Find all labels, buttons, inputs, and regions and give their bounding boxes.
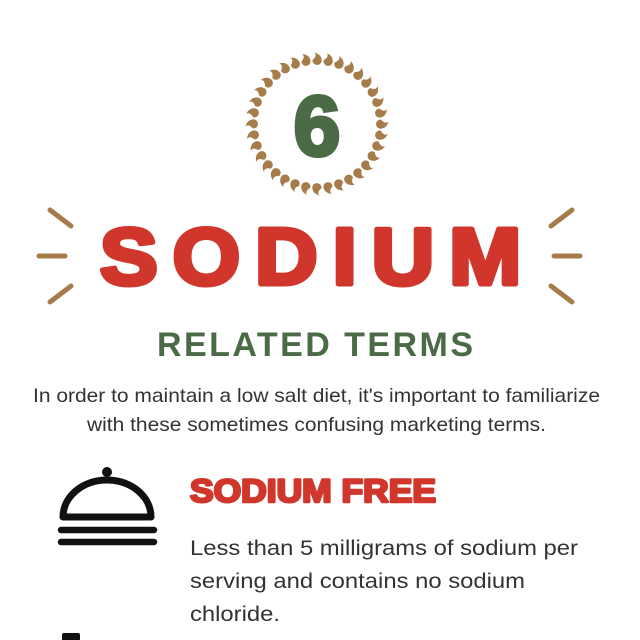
intro paragraph: In order to maintain a low salt diet, it's important to familiarize xyxy=(33,385,600,407)
badge: number 6 in drop ring xyxy=(246,52,388,196)
description: sodium free xyxy=(190,537,578,626)
description: sodium free: Less than 5 milligrams of sodium per xyxy=(190,537,578,560)
badge: number 6 in drop ring: 6 xyxy=(294,79,340,173)
icon: next item (partial) xyxy=(62,633,80,640)
title: SODIUM: SODIUM xyxy=(100,212,536,301)
icon: food cloche xyxy=(61,467,154,542)
intro paragraph xyxy=(33,385,600,436)
intro paragraph: with these sometimes confusing marketing terms. xyxy=(86,414,546,436)
rays left and right xyxy=(39,210,580,302)
description: sodium free: serving and contains no sodium xyxy=(190,570,525,593)
subtitle: RELATED TERMS: RELATED TERMS xyxy=(157,326,473,364)
heading: SODIUM FREE: SODIUM FREE xyxy=(190,473,436,509)
description: sodium free: chloride. xyxy=(190,603,280,626)
